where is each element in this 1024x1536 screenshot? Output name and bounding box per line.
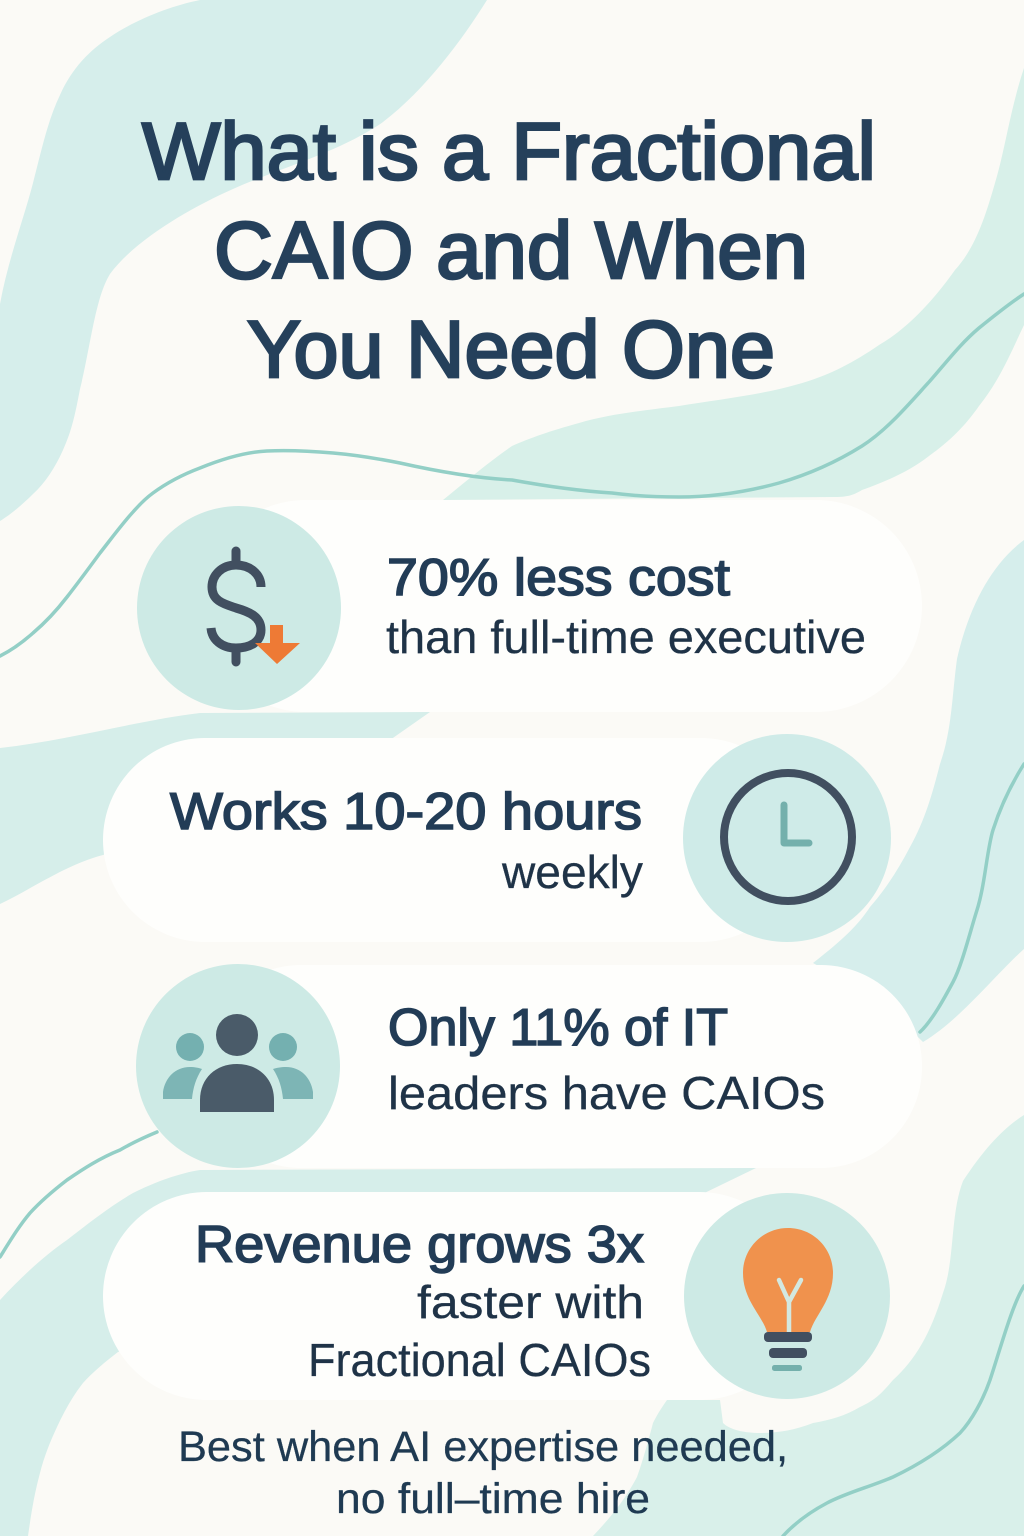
panel: hours <box>103 734 891 942</box>
title: You Need One <box>247 305 775 395</box>
footer note: no full–time hire <box>336 1475 650 1523</box>
stat: only 11% of IT: Only 11% of IT <box>388 999 728 1057</box>
icon: people <box>136 964 340 1168</box>
description: faster with Fractional CAIOs: Fractional CAIOs <box>308 1334 651 1386</box>
icon: light bulb <box>684 1193 890 1399</box>
description: cost: than full-time executive <box>386 611 866 663</box>
description: faster with Fractional CAIOs <box>308 1276 651 1386</box>
panel: revenue <box>103 1192 890 1400</box>
stat: 70% less cost: 70% less cost <box>387 549 731 607</box>
stat: revenue grows 3x: Revenue grows 3x <box>195 1216 644 1274</box>
description: leaders have CAIOs: leaders have CAIOs <box>388 1067 825 1119</box>
description: faster with Fractional CAIOs: faster with <box>417 1276 644 1328</box>
panel: cost <box>137 500 922 712</box>
icon: clock <box>683 734 891 942</box>
footer note <box>178 1423 788 1523</box>
panel: adoption <box>136 964 922 1168</box>
title: CAIO and When <box>214 206 808 296</box>
description: weekly: weekly <box>501 846 643 898</box>
footer note: Best when AI expertise needed, <box>178 1423 788 1471</box>
stat: works 10-20 hours: Works 10-20 hours <box>170 783 642 841</box>
icon: dollar with down arrow <box>137 506 341 710</box>
title: What is a Fractional <box>142 107 876 197</box>
title <box>142 107 876 395</box>
